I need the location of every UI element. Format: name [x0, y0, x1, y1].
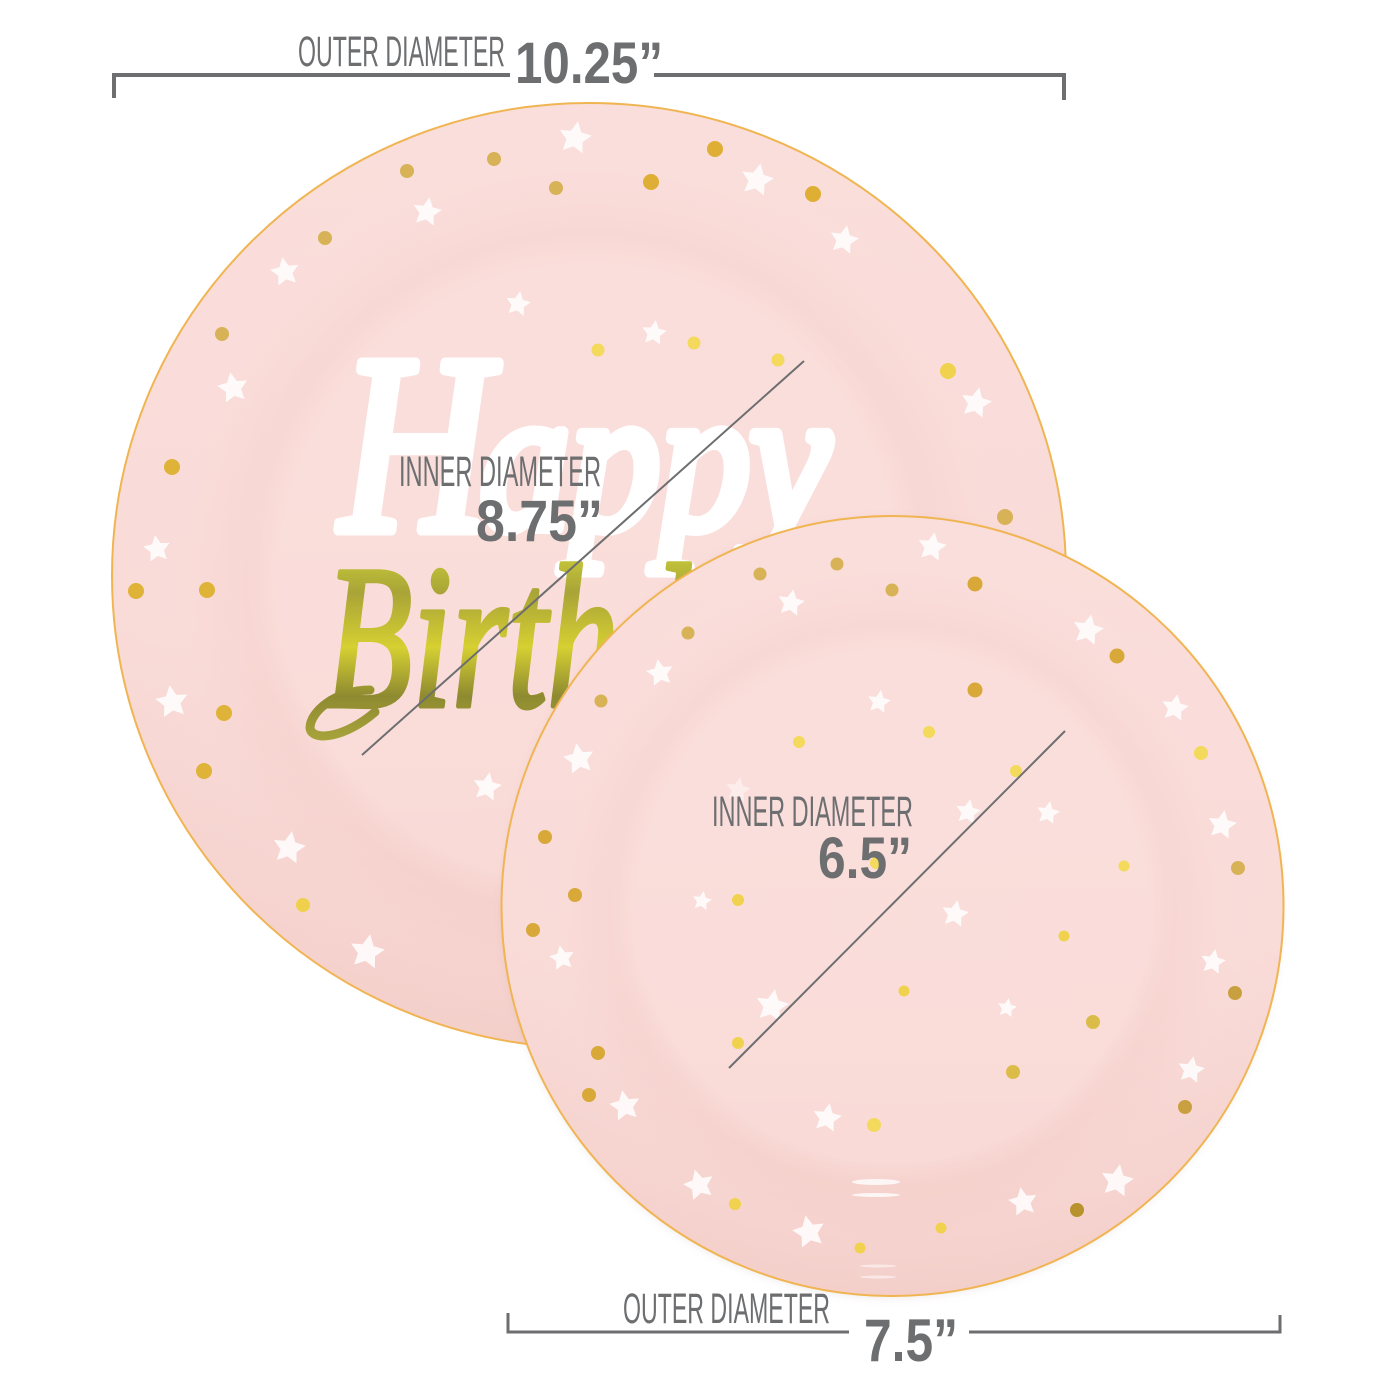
small plate highlights — [852, 1179, 900, 1278]
small plate shadow — [502, 518, 1282, 1298]
label: outer diameter large: OUTER DIAMETER — [298, 28, 505, 76]
value: 6.5 inches: 6.5” — [818, 826, 912, 891]
Birthday lettering: Birthday — [325, 524, 826, 751]
Birthday lettering — [310, 524, 826, 751]
Birthday B swash — [310, 690, 375, 736]
Happy lettering — [338, 304, 831, 586]
large plate body — [112, 103, 1066, 1048]
label: inner diameter small: INNER DIAMETER — [712, 788, 913, 836]
large plate — [112, 103, 1066, 1048]
outer diameter 7.5 bracket — [508, 1313, 1280, 1332]
small plate body — [502, 516, 1284, 1296]
inner diameter 8.75 arrow line — [362, 361, 804, 755]
small plate — [502, 516, 1284, 1298]
label: outer diameter small: OUTER DIAMETER — [623, 1285, 830, 1333]
large plate inner well — [119, 105, 1059, 1045]
large plate gold dots — [128, 141, 1013, 912]
large plate rim stars — [142, 118, 994, 969]
value: 10.25 inches: 10.25” — [515, 31, 663, 96]
Happy lettering: appy — [480, 346, 831, 573]
outer diameter 10.25 bracket — [114, 75, 1064, 100]
value: 8.75 inches: 8.75” — [476, 489, 603, 554]
label: inner diameter large: INNER DIAMETER — [399, 448, 601, 496]
inner diameter 6.5 arrow line — [729, 731, 1065, 1068]
small plate inner well — [504, 518, 1280, 1294]
value: 7.5 inches: 7.5” — [864, 1307, 958, 1374]
Happy lettering: H — [338, 304, 500, 586]
small plate gold dots — [526, 558, 1245, 1254]
small plate stars — [548, 530, 1239, 1249]
